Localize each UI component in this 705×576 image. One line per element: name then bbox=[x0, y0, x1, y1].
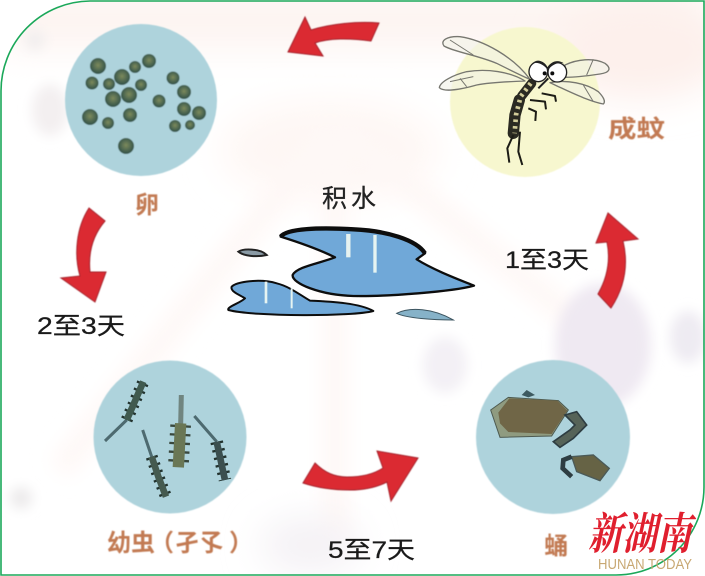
panel: adult mosquito circle bbox=[439, 27, 609, 177]
text: 5 to 7 days: 5至7天 bbox=[328, 537, 415, 564]
icon: water puddles bbox=[228, 228, 474, 320]
text: 2 to 3 days: 2至3天 bbox=[37, 313, 125, 340]
label: larva: 幼虫（孑孓） bbox=[107, 530, 253, 557]
icon: pupae bbox=[491, 390, 609, 481]
label: pupa: 蛹 bbox=[544, 533, 568, 560]
label: adult mosquito: 成蚊 bbox=[608, 116, 665, 143]
watermark: Hunan Today logo: HUNAN TODAY bbox=[598, 557, 692, 573]
arrow: adult to egg bbox=[288, 17, 379, 56]
panel: larva circle bbox=[94, 360, 246, 514]
arrow: egg to larva bbox=[61, 208, 106, 302]
arrow: pupa to adult bbox=[596, 213, 638, 308]
icon: larvae bbox=[105, 382, 225, 497]
arrow: larva to pupa bbox=[303, 451, 418, 501]
label: egg: 卵 bbox=[135, 192, 159, 219]
text: 1 to 3 days: 1至3天 bbox=[505, 247, 589, 274]
panel: egg circle bbox=[65, 24, 217, 176]
heading: stagnant water: 积水 bbox=[322, 185, 380, 213]
panel: pupa circle bbox=[476, 360, 630, 514]
icon: mosquito bbox=[439, 37, 609, 165]
